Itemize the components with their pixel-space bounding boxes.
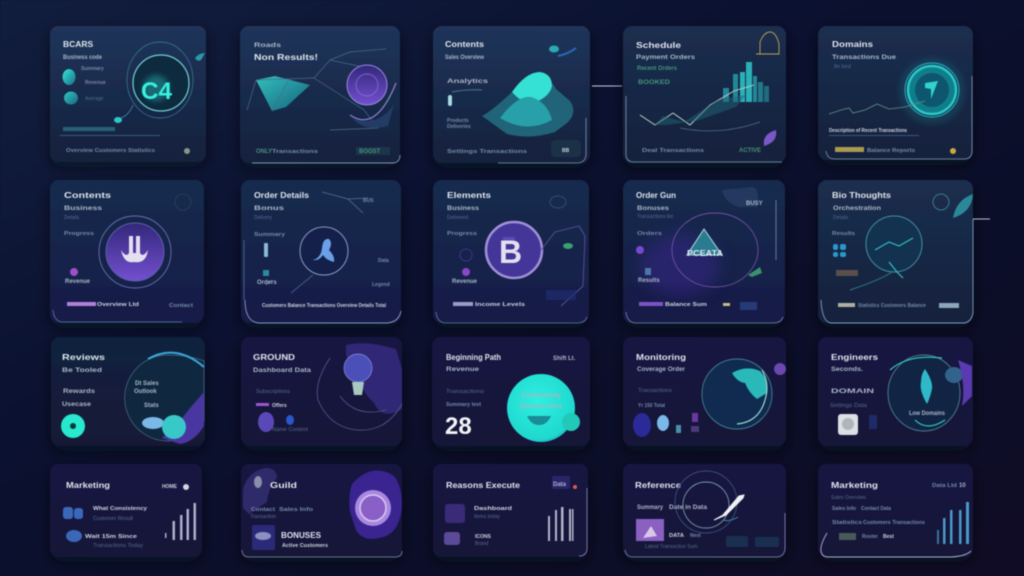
bar chart [165, 503, 196, 540]
card 10 title: Bio Thoughts [832, 190, 891, 200]
card 17 title: Guild [270, 480, 297, 490]
teal polygon shape [256, 76, 310, 111]
card 9 labels: Bonuses [637, 206, 670, 212]
card 17 text blocks: BONUSES [281, 530, 321, 540]
card 12 title: GROUND [253, 352, 295, 362]
card 15 subtitle: Seconds. [831, 367, 863, 373]
card 11 labels: Usecase [62, 402, 92, 408]
panel: card 1 teal ring [50, 26, 206, 162]
card 8 subtitle: Business [447, 206, 480, 212]
icon: teal disc [507, 374, 580, 442]
connector arrow right of card 10 [973, 218, 990, 220]
card 7 footer [245, 300, 401, 323]
card 12 labels [256, 389, 291, 409]
card 3 badge: BB [562, 148, 570, 154]
card 11 subtitle: Be Tooled [62, 368, 102, 374]
card 12 labels: Subscriptions [256, 389, 291, 395]
top right icon [550, 196, 566, 208]
purple outline shape and leaf [541, 226, 585, 306]
icon: blue devices [63, 507, 83, 542]
panel: card 7 glass sphere [241, 180, 401, 323]
card 16 title: Marketing [66, 480, 110, 490]
icon: glass sphere [850, 216, 922, 290]
panel: card 18 bars and icons [433, 464, 588, 557]
icon: glass sphere [300, 227, 348, 275]
purple dot [636, 246, 644, 254]
card 18 text rows: Brand [475, 541, 489, 547]
card 18 text rows [474, 506, 512, 547]
card 20 title: Marketing [831, 480, 878, 490]
card 7 labels: Delivery [254, 215, 273, 221]
card 4 subtitle: Payment Orders [636, 55, 696, 61]
card 2 title: Roads [254, 43, 282, 49]
card 7 subtitle: Bonus [254, 206, 285, 212]
card 3 footer: Settings Transactions [447, 149, 527, 155]
right border [579, 488, 587, 556]
card 1 list labels: Revenue [85, 80, 106, 86]
card 20 text rows: Sales Info [832, 506, 856, 512]
icon: blue blobs [258, 412, 294, 432]
card 11 labels: Rewards [63, 389, 96, 395]
card 17 text blocks: Sales Info [279, 507, 313, 513]
card 20 text rows: Sales Overview [831, 495, 866, 501]
card 10 labels [832, 206, 881, 237]
card 18 text rows: Dashboard [474, 506, 512, 512]
arc stat labels [134, 381, 159, 409]
icon: purple sphere [347, 65, 396, 128]
card 2 footer [252, 147, 400, 163]
network lines [247, 49, 386, 130]
top right chip [722, 187, 763, 207]
card 10 labels: Results [832, 231, 855, 237]
icon: small glyphs [263, 243, 269, 276]
icon: small device [839, 533, 856, 540]
card 15 title: Engineers [831, 352, 878, 362]
card 12 subtitle: Dashboard Data [253, 368, 312, 374]
card 7 labels [254, 215, 285, 238]
card 14 subtitle: Coverage Order [637, 367, 686, 373]
card 3 labels [447, 79, 489, 130]
panel: card 2 teal polygon and purple sphere [240, 26, 400, 163]
card 6 labels [64, 215, 94, 237]
card 1 list labels: Average [85, 96, 104, 102]
panel: card 15 teal leaf ring [818, 337, 973, 446]
icon row: gems [633, 413, 699, 437]
arc stat labels: Stats [144, 403, 159, 409]
icon: globe [702, 359, 786, 429]
card 8 footer: Income Levels [475, 302, 525, 308]
card 8 subtitle: Progress [447, 231, 477, 237]
small colored label [836, 270, 858, 276]
card 15 labels: Settings Data [830, 403, 867, 409]
card 7 labels: Summary [254, 232, 285, 238]
purple seal [349, 471, 402, 539]
card 6 subtitle: Business [64, 206, 103, 212]
card 14 title: Monitoring [636, 352, 686, 362]
card 13 labels: Transactions [446, 389, 485, 395]
card 18 text rows: ICONS [475, 534, 492, 540]
card 18 title: Reasons Execute [446, 480, 520, 490]
card 20 text rows: Roster [862, 534, 878, 540]
panel: card 10 teal glass sphere [818, 180, 973, 323]
card 19 text rows: Next [690, 533, 701, 539]
card 20 header tag: Data Ltd [932, 483, 957, 489]
card 13 labels [446, 389, 485, 408]
icon: triangle badge: PCEATA [687, 249, 723, 258]
card 17 text blocks [250, 507, 328, 549]
card 6 labels: Progress [64, 231, 94, 237]
wire shell [317, 358, 402, 430]
teal wing top right [933, 194, 973, 218]
card 16 text rows: Wait 15m Since [85, 534, 137, 540]
icon: bulb orb [344, 354, 372, 395]
icon: purple thumbnail [636, 519, 664, 541]
card 3 badge [498, 118, 586, 163]
card 9 labels: Orders [637, 231, 662, 237]
card 10 footer [821, 219, 973, 323]
card 5 line chart [829, 101, 925, 114]
card 6 title: Contents [64, 190, 111, 200]
card 4 title: Schedule [636, 40, 681, 50]
card 19 buttons [726, 536, 779, 547]
card 1 progress strip [60, 127, 160, 136]
panel: card 4 growth chart [623, 26, 786, 163]
card 19 text rows: Date in Data [669, 505, 708, 511]
card 9 small icons: Results [638, 278, 660, 284]
card 13 subtitle: Revenue [446, 367, 480, 373]
card 8 subtitle [447, 206, 480, 237]
card 3 subtitle: Sales Overview [445, 55, 484, 61]
card 20 text rows: Contact Data [861, 506, 891, 512]
card 16 header tag [162, 484, 189, 490]
purple glow [640, 235, 720, 295]
ring with teal leaf [888, 355, 972, 431]
teal wave shape [482, 72, 573, 137]
icon: purple medallion [99, 216, 171, 288]
card 7 side labels: BUS [363, 198, 374, 204]
card 20 text rows: Best [883, 534, 894, 540]
card 10 footer: Statistics Customers Balance [858, 303, 926, 309]
panel: card 9 triangle badge [623, 180, 785, 323]
panel: card 12 violet orb [241, 337, 402, 446]
card 19 text rows [637, 505, 708, 550]
card 4 green labels: BOOKED [638, 80, 671, 86]
card 19 title: Reference [635, 480, 681, 490]
icon: glowing ring with glyph [127, 42, 193, 118]
border [625, 513, 785, 557]
card 9 labels [637, 206, 674, 237]
icon: square thumbnail [252, 525, 275, 550]
card 3 labels: Products [447, 118, 469, 124]
card 9 footer [626, 200, 783, 323]
ring text: Low Domains [909, 411, 946, 417]
card 10 labels: Details [833, 215, 849, 221]
card 7 side labels: Legend [372, 282, 390, 288]
card 15 labels [830, 389, 874, 409]
card 3 labels: Deliveries [447, 124, 471, 130]
card 20 text rows: Customers Transactions [863, 520, 925, 526]
teal accents [114, 53, 205, 123]
card 7 side labels [257, 198, 390, 288]
card 19 text rows: Latest Transaction Sum [645, 544, 698, 550]
icon: letter circle [486, 222, 542, 278]
panel: card 20 bars [818, 464, 973, 557]
card 18 text rows: Items today [474, 514, 500, 520]
card 5 faint label: Be best [834, 64, 852, 70]
card 14 labels [638, 388, 673, 409]
icon: teal dial [899, 58, 965, 124]
card 11 labels [62, 389, 96, 408]
card 1 list labels [81, 66, 106, 102]
card 4 footer: ACTIVE [739, 148, 761, 154]
teal small icons [833, 244, 846, 257]
card 6 labels: Details [64, 215, 80, 221]
card 2 subtitle: Non Results! [254, 52, 318, 62]
teal blob top right [549, 46, 576, 56]
card 16 header tag: HOME [162, 484, 178, 490]
card 4 green labels [637, 66, 678, 86]
bottom border [242, 550, 402, 557]
icon: triangle badge [672, 213, 758, 287]
card 9 labels: Transactions list [637, 214, 674, 220]
card 1 footer text [66, 148, 190, 154]
card 4 footer: Deal Transactions [642, 148, 704, 154]
panel: card 19 orbit and thumbnail [623, 464, 786, 557]
card 19 text rows: DATA [669, 533, 684, 539]
large arc with purple blob [125, 353, 204, 444]
icon: yellow arch [756, 32, 779, 54]
card 6 footer: Overview Ltd [97, 302, 139, 308]
card 5 footer: Balance Reports [867, 148, 915, 154]
icon: purple leaf [764, 130, 776, 146]
card 8 subtitle: Delivered [447, 215, 468, 221]
card 5 footer [826, 76, 972, 159]
card 20 text rows: Statistics [832, 520, 862, 526]
card 1 list labels: Summary [81, 66, 104, 72]
card 2 footer: BOOST [359, 149, 381, 155]
card 7 title: Order Details [254, 190, 309, 200]
card 5 text strip [829, 128, 919, 136]
card 7 footer: Customers Balance Transactions Overview Details Total [262, 303, 387, 309]
card 3 title: Contents [445, 39, 484, 49]
card 2 footer: Transactions [272, 149, 318, 155]
purple blob icon [70, 268, 78, 276]
card 6 footer [53, 302, 193, 322]
card 5 subtitle: Transactions Due [832, 55, 897, 61]
card 15 labels: DOMAIN [831, 389, 874, 395]
panel: card 11 teal donut [51, 337, 205, 446]
arc stat labels: Dt Sales [135, 381, 159, 387]
border [821, 533, 971, 557]
card 6 small label: Revenue [65, 279, 91, 285]
line chart [640, 85, 760, 131]
icon: white square [838, 414, 858, 435]
icon: teal orbs [62, 69, 78, 104]
icon: teal disc: Discover more [520, 404, 563, 410]
card 16 text rows: Transactions Today [93, 543, 144, 549]
panel: card 16 bars [50, 464, 202, 557]
panel: card 5 teal dial [818, 26, 973, 160]
top right chip: BUSY [746, 201, 763, 207]
card 10 labels: Orchestration [833, 206, 881, 212]
panel: card 14 teal globe [623, 337, 786, 446]
card 2 footer: ONLY [256, 149, 272, 155]
teal bars chart [723, 62, 769, 102]
card 7 side labels: Data [378, 258, 389, 264]
violet background blob [346, 343, 402, 414]
icon: orbit ring with streak [675, 471, 744, 533]
card 13 corner label: Shift Lt. [553, 356, 576, 362]
card 9 footer: Balance Sum [665, 302, 708, 308]
panel: card 3 teal wave [433, 26, 590, 163]
icon: glowing ring with glyph: C4 [141, 78, 173, 105]
icon: small glyphs [448, 90, 482, 106]
icon: letter circle: B [499, 234, 522, 270]
card 12 footer label: Name Content [272, 427, 309, 433]
card 7 side labels: Orders [257, 280, 277, 286]
card 16 text rows: Customer Result [93, 516, 134, 522]
card 12 labels: Offers [272, 403, 287, 409]
card 7 network lines and icons [244, 192, 368, 300]
purple silhouette top-left [243, 468, 277, 514]
card 20 text rows [831, 495, 925, 540]
card 9 small icons [638, 267, 762, 284]
small purple blobs [452, 249, 478, 285]
card 4 green labels: Recent Orders [637, 66, 678, 72]
card 13 title: Beginning Path [446, 352, 501, 362]
card 9 title: Order Gun [636, 190, 676, 200]
panel: card 6 purple medallion [50, 180, 204, 323]
bar chart [937, 502, 969, 544]
icon: teal disc: Community [521, 393, 562, 399]
panel: card 17 purple seal [241, 464, 402, 557]
card 1 title: BCARS [63, 39, 94, 49]
card 14 labels: Transactions [638, 388, 673, 394]
icon: teal donut [61, 414, 85, 438]
card 14 labels: Yr 150 Total [638, 403, 666, 409]
card 17 text blocks: Contact [251, 507, 275, 513]
big stat number: 28 [445, 413, 472, 440]
faint top right glyph [175, 194, 191, 210]
card 16 text rows: What Consistency [93, 506, 147, 512]
arc stat labels: Outlook [134, 389, 157, 395]
panel: card 13 big teal disc with stat [432, 337, 590, 446]
card 19 text rows: Summary [637, 505, 664, 511]
card 17 text blocks: Transaction [250, 514, 276, 520]
card 1 subtitle: Business code [63, 55, 103, 61]
card 18 header tag: Data [553, 482, 567, 488]
card 18 header tag [552, 476, 577, 489]
small side glyph [869, 415, 877, 429]
card 17 text blocks: Active Customers [282, 543, 328, 549]
card 11 title: Reviews [62, 352, 105, 362]
card 4 footer [626, 96, 782, 162]
connector arrow between cards 3 and 4 [592, 85, 622, 87]
card 1 footer text: Overview Customers Statistics [66, 148, 155, 154]
card 8 footer [436, 290, 587, 323]
bar chart [548, 507, 574, 541]
card 20 header tag [932, 483, 966, 489]
card 5 title: Domains [832, 39, 873, 49]
small purple blobs: Revenue [452, 279, 478, 285]
card 6 footer: Contact [169, 303, 193, 309]
icon: teal orb cluster [142, 415, 186, 439]
card 13 labels: Summary text [446, 402, 481, 408]
card 3 labels: Analytics [447, 79, 489, 85]
card 20 header tag: 10 [959, 483, 966, 489]
panel: card 8 purple letter circle [433, 180, 589, 323]
card 8 title: Elements [447, 190, 491, 200]
card 5 text strip: Description of Recent Transactions [829, 128, 907, 134]
card 16 text rows [85, 506, 147, 549]
icon: square gems [444, 504, 465, 545]
